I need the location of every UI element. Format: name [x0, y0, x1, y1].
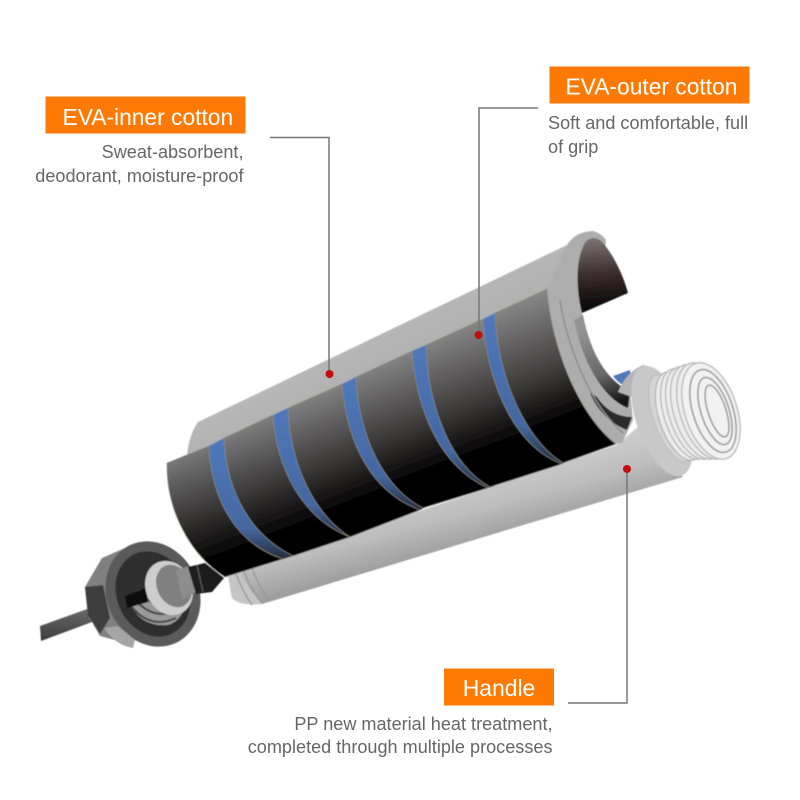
- leader line: inner cotton: [270, 138, 334, 378]
- label: EVA-outer cotton: [550, 66, 750, 104]
- label: EVA-inner cotton: [46, 96, 246, 134]
- label: EVA-outer cotton: EVA-outer cotton: [566, 74, 737, 100]
- description: outer cotton: [548, 113, 748, 157]
- end cap assembly: [85, 526, 224, 662]
- description: outer cotton: of grip: [548, 137, 598, 157]
- black foam segments: [167, 289, 616, 577]
- description: inner cotton: Sweat-absorbent,: [102, 142, 244, 162]
- outer shell: [187, 245, 570, 470]
- description: outer cotton: Soft and comfortable, full: [548, 113, 748, 133]
- illustration: handle exploded view: [40, 231, 751, 662]
- leader line: handle: [568, 465, 631, 703]
- label: EVA-inner cotton: EVA-inner cotton: [62, 104, 233, 130]
- blue inner bands: [209, 313, 570, 559]
- description: handle: completed through multiple processes: [248, 737, 552, 757]
- description: inner cotton: [35, 142, 244, 186]
- callout: EVA-outer cotton: [548, 66, 750, 157]
- description: handle: [248, 714, 552, 757]
- cable: [40, 608, 92, 641]
- description: handle: PP new material heat treatment,: [294, 714, 552, 734]
- threaded end: [619, 355, 751, 484]
- callout: EVA-inner cotton: [35, 96, 246, 186]
- leader line: outer cotton: [474, 108, 538, 339]
- label: Handle: [444, 668, 554, 706]
- label: Handle: Handle: [463, 675, 535, 701]
- callout: Handle: [248, 668, 554, 757]
- tube end rings: [547, 231, 652, 444]
- silver handle tube: [228, 425, 683, 605]
- description: inner cotton: deodorant, moisture-proof: [35, 166, 244, 186]
